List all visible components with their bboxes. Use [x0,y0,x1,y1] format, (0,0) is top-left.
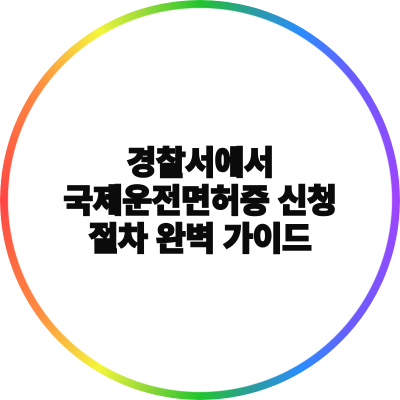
title: 경찰서에서 [126,145,274,181]
title: 국제운전면허증 신청 [63,183,337,219]
title [63,145,337,257]
title: 절차 완벽 가이드 [89,221,311,257]
